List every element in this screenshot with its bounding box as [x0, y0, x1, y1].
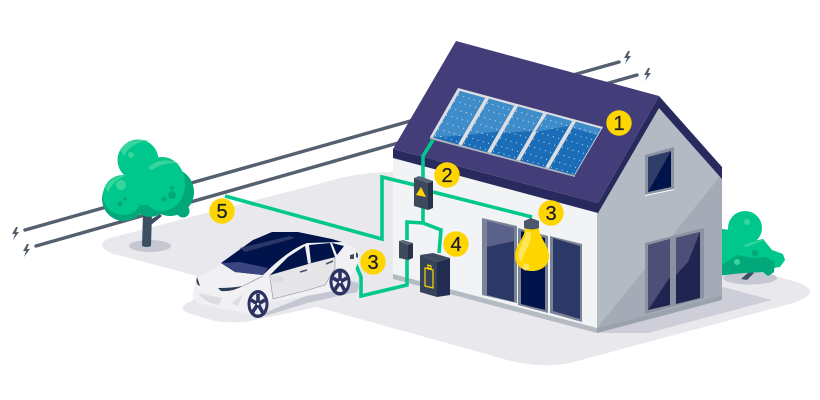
roof [393, 41, 659, 203]
icon: battery [425, 265, 433, 288]
number badge 2: 2 [441, 165, 453, 187]
door handles and mirror [300, 261, 333, 272]
solar panels [430, 88, 603, 177]
number badge 5: 5 [216, 201, 228, 223]
green power cables [225, 140, 532, 296]
light bulb [515, 218, 549, 271]
gable edge [598, 96, 722, 213]
house shadow [597, 287, 772, 333]
number badge 3 car: 3 [367, 252, 379, 274]
breaker box [414, 176, 433, 210]
house [393, 41, 722, 333]
window center [518, 228, 548, 313]
car [193, 232, 360, 318]
inverter box [399, 240, 413, 260]
ground [102, 172, 810, 365]
grille [198, 293, 243, 306]
panel 3 [491, 106, 543, 160]
icon: sparks on power lines [12, 51, 651, 257]
headlight [196, 277, 243, 291]
roof fascia [393, 149, 598, 213]
window left [482, 218, 517, 303]
home battery [420, 253, 450, 297]
front wall [393, 157, 597, 328]
side windows [645, 228, 704, 314]
gable wall [597, 106, 722, 328]
number badge 3 bulb: 3 [545, 203, 557, 225]
window right [550, 236, 582, 322]
foundation [393, 274, 597, 333]
doors [270, 257, 335, 299]
bush [715, 211, 785, 284]
tree [102, 140, 194, 252]
windshield and roof [221, 232, 342, 275]
gable foundation [597, 295, 722, 333]
number badge 5 [209, 198, 235, 224]
number badge 2 [434, 162, 460, 188]
car shadow [262, 280, 360, 316]
charge port [350, 252, 358, 259]
car body [193, 232, 360, 316]
panel 1 [433, 91, 485, 144]
number badge 4: 4 [450, 234, 462, 256]
panel 4 [520, 114, 572, 168]
gable window [645, 147, 674, 196]
gable wall shade [597, 174, 722, 328]
number badge 4 [443, 231, 469, 257]
hood line [243, 276, 263, 286]
number badge 3 car [360, 249, 386, 275]
wheel rear [330, 268, 350, 296]
side windows [270, 246, 308, 275]
panel 5 [549, 122, 601, 175]
power lines [25, 62, 637, 246]
panel 2 [462, 99, 514, 152]
number badge 1: 1 [613, 113, 625, 135]
number badge 1 [606, 110, 632, 136]
wheel front [248, 290, 268, 318]
icon: warning triangle [416, 187, 426, 197]
front windows [482, 218, 582, 322]
number badge 3 bulb [538, 200, 564, 226]
